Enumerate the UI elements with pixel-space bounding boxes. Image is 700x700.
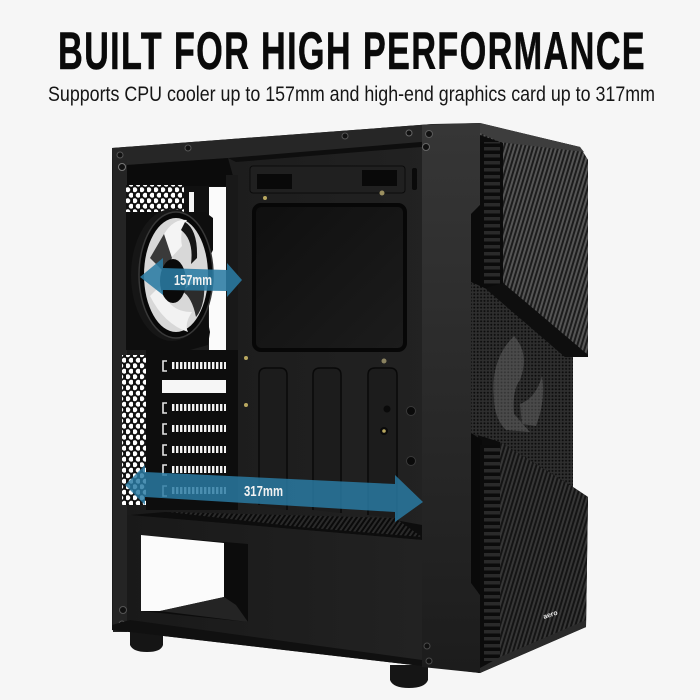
lower front panel <box>471 433 588 673</box>
case feet <box>130 630 428 688</box>
computer case <box>112 123 588 688</box>
case rear body <box>112 123 480 673</box>
mounting screws <box>117 130 416 662</box>
arrow: 317mm graphics card clearance <box>125 465 423 522</box>
lower rear mesh vent <box>122 355 146 505</box>
fan logo mesh overlay <box>490 330 550 436</box>
expansion slots <box>146 350 238 510</box>
lower tray panels <box>259 368 397 518</box>
motherboard cutout panel <box>254 205 405 350</box>
arrow: 317mm graphics card clearance: 317mm <box>244 483 283 500</box>
front panel silhouette <box>478 123 588 673</box>
PSU opening <box>141 535 248 622</box>
pillar corner screws <box>422 130 432 664</box>
PSU shroud <box>112 512 430 667</box>
brand logo: aero <box>542 610 559 621</box>
front side pillar <box>422 123 480 673</box>
front fan logo glow <box>493 336 543 432</box>
arrow: 157mm CPU cooler clearance: 157mm <box>174 272 212 289</box>
arrow: 157mm CPU cooler clearance <box>140 258 242 297</box>
rear fan <box>131 209 213 341</box>
rear window opening <box>184 175 238 355</box>
upper front panel <box>471 123 588 357</box>
left frame rail <box>113 160 127 632</box>
top drive bracket <box>250 166 417 193</box>
fan mounting plate <box>126 212 213 350</box>
top frame rail <box>112 124 433 190</box>
front mesh section <box>471 282 573 487</box>
upper rear mesh vent <box>126 185 184 215</box>
